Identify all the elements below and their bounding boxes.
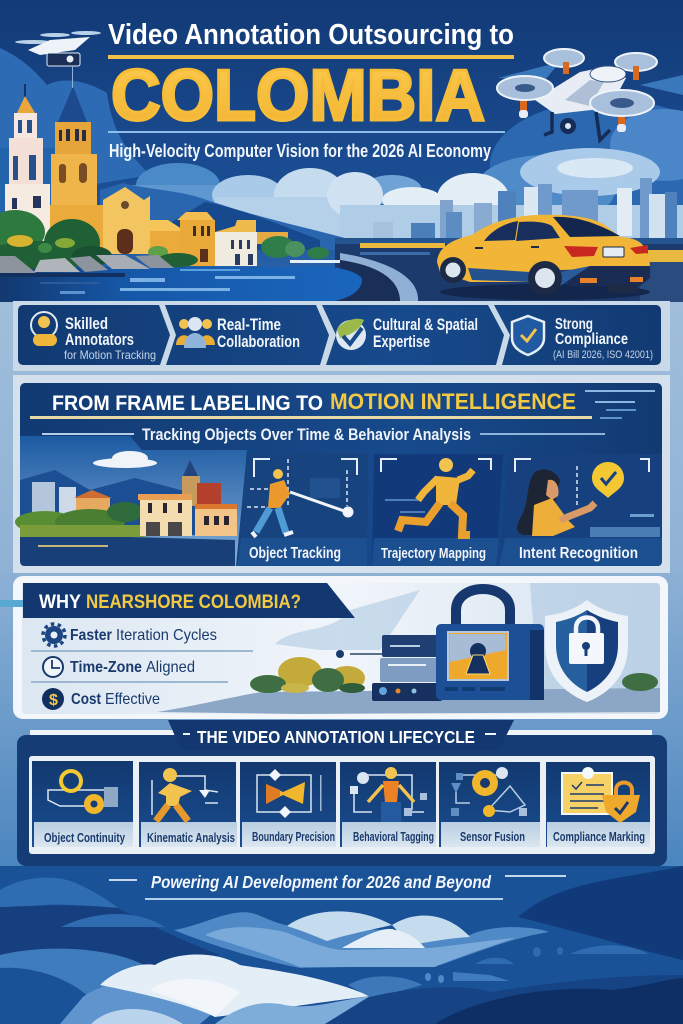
item: skilled annotators: for Motion Tracking [64,348,156,362]
card: trajectory mapping [372,454,503,566]
heading [0,583,355,618]
sea [0,266,362,302]
item: cultural and spatial expertise: Expertise [373,332,430,351]
item: cultural and spatial expertise: Cultural & Spatial [373,315,478,334]
icon: yellow car [437,215,650,300]
heading banner: THE VIDEO ANNOTATION LIFECYCLE [197,727,475,747]
card: kinematic analysis [139,762,237,847]
item: skilled annotators: Annotators [65,330,134,349]
list item: time-zone aligned: Time-Zone [70,659,142,676]
panel: why nearshore colombia [0,576,668,719]
card: sensor fusion [439,762,540,847]
card: object continuity: Object Continuity [44,830,126,845]
list item: cost effective: Cost [71,691,102,708]
icon: padlock [436,589,544,700]
card: behavioral tagging [340,762,436,847]
list item: cost effective: Effective [105,691,160,708]
icon: bushes [250,657,365,693]
closing tagline: Powering AI Development for 2026 and Beyond [151,872,491,892]
heading: NEARSHORE COLOMBIA? [86,591,301,613]
item: strong compliance: (AI Bill 2026, ISO 42001) [553,349,653,361]
panel: motion intelligence [13,375,670,573]
item: strong compliance: Strong [555,316,593,333]
card: boundary precision [240,762,336,847]
skyline [373,178,677,247]
list item: faster iteration cycles: Faster [70,627,112,644]
card: intent recognition [499,454,662,566]
item: real-time collaboration [176,315,300,351]
panel: lifecycle [17,720,667,866]
subheading: Tracking Objects Over Time & Behavior Analysis [142,425,471,444]
title [108,19,514,161]
card: intent recognition: Intent Recognition [519,545,638,562]
heading: WHY [39,591,81,613]
trees and rocks [0,210,340,277]
card: compliance marking [546,762,650,847]
icon: server stack [336,635,442,701]
list item: cost effective [42,688,160,710]
panel: benefits strip [13,301,670,371]
item: cultural and spatial expertise [336,315,478,351]
title: Video Annotation Outsourcing to [108,19,514,51]
item: strong compliance: Compliance [555,331,628,348]
list item: faster iteration cycles [31,624,253,652]
bottom clouds [0,866,683,1024]
card: kinematic analysis: Kinematic Analysis [147,830,235,845]
hero illustration background [0,0,683,302]
card: sensor fusion: Sensor Fusion [460,829,525,844]
heading: MOTION INTELLIGENCE [330,389,576,414]
card: object continuity [32,761,133,847]
icon: shield with lock [545,600,658,702]
road and ground [335,238,683,302]
card: behavioral tagging: Behavioral Tagging [353,829,434,844]
icon: large drone [497,49,683,140]
title: COLOMBIA [111,56,485,136]
card: trajectory mapping: Trajectory Mapping [381,545,486,562]
item: skilled annotators: Skilled [65,314,108,333]
white tower [5,84,50,244]
orange church tower [50,86,103,255]
card: compliance marking: Compliance Marking [553,829,645,844]
list item: time-zone aligned: Aligned [146,659,195,676]
list item: time-zone aligned [31,657,228,683]
item: strong compliance [512,316,653,361]
list item: cost effective: $ [49,692,58,709]
item: real-time collaboration: Real-Time [217,315,281,334]
card: object tracking [237,454,368,566]
list item: faster iteration cycles: Iteration Cycles [116,627,217,644]
heading: FROM FRAME LABELING TO [52,392,323,415]
title: High-Velocity Computer Vision for the 2026 AI Economy [109,141,491,161]
heading [30,389,655,419]
item: skilled annotators [31,312,156,362]
item: real-time collaboration: Collaboration [217,332,300,351]
card: boundary precision: Boundary Precision [252,829,335,844]
heading banner [168,720,514,750]
card: object tracking: Object Tracking [249,545,341,562]
illustration: town scene [15,436,247,566]
icon: small drone [15,31,101,88]
cathedral and colonial houses [103,187,288,266]
